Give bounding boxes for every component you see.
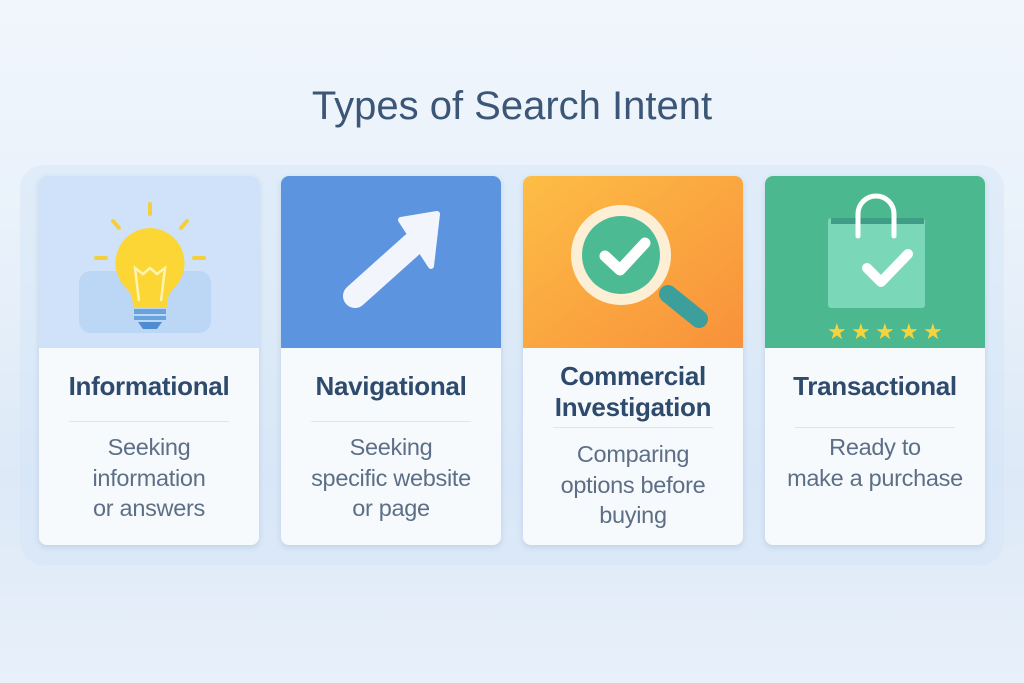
body text: or page <box>352 495 430 521</box>
icon: magnifier <box>523 176 743 348</box>
body text: information <box>93 464 205 490</box>
icon: shopping bag with stars: ★ <box>923 319 943 344</box>
body text: specific website <box>311 464 471 490</box>
body text: Ready to <box>829 434 921 460</box>
panel: transactional <box>765 176 985 545</box>
body text: buying <box>599 502 667 528</box>
body text <box>787 434 963 491</box>
body text <box>311 434 471 521</box>
title: Types of Search Intent <box>312 84 712 128</box>
body text: make a purchase <box>787 464 963 490</box>
body text: or answers <box>93 495 205 521</box>
heading: Commercial <box>560 361 706 391</box>
panel: navigational <box>281 176 501 545</box>
icon: light bulb <box>39 176 259 348</box>
icon: arrow <box>281 176 501 348</box>
icon: shopping bag with stars: ★ <box>851 319 871 344</box>
heading: Transactional <box>793 371 957 401</box>
heading: Navigational <box>316 371 466 401</box>
panel: informational <box>39 176 259 545</box>
body text <box>561 441 705 528</box>
body text: options before <box>561 472 705 498</box>
icon: shopping bag with stars: ★ <box>899 319 919 344</box>
body text: Seeking <box>108 434 190 460</box>
heading: Investigation <box>555 392 711 422</box>
heading <box>555 361 711 422</box>
panel: commercial investigation <box>523 176 743 545</box>
icon: shopping bag with stars: ★ <box>827 319 847 344</box>
icon: shopping bag with stars <box>765 176 985 348</box>
body text: Comparing <box>577 441 689 467</box>
heading: Informational <box>69 371 229 401</box>
body text <box>93 434 205 521</box>
icon: shopping bag with stars: ★ <box>875 319 895 344</box>
body text: Seeking <box>350 434 432 460</box>
